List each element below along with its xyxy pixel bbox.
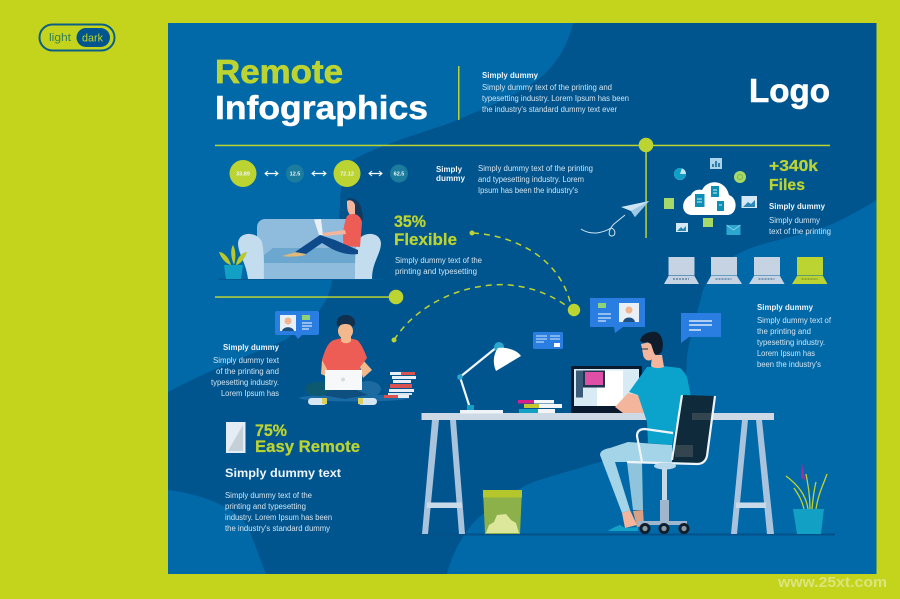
left text block: Simply dummy text [213, 356, 280, 365]
intro text block: the industry's standard dummy text ever [482, 105, 617, 114]
panel: infographic background [168, 23, 876, 574]
icon: potted plant near sofa [219, 245, 247, 279]
right text block: Simply dummy [757, 303, 814, 312]
text block: simply dummy: Simply dummy text of the printing [478, 164, 593, 173]
right text block: the printing and [757, 327, 811, 336]
icon: paper plane [581, 201, 649, 236]
icon: tablet [226, 422, 246, 453]
title divider [458, 66, 460, 120]
number circles row: 72.12 [340, 172, 354, 178]
number circles row [230, 160, 408, 187]
left text block [211, 343, 280, 398]
left text block: typesetting industry. [211, 378, 279, 387]
lower left text block: Simply dummy text [225, 466, 341, 480]
watermark: www.25xt.com [777, 574, 887, 591]
text block: simply dummy: Simply [436, 165, 463, 174]
flexible stat: printing and typesetting [395, 267, 477, 276]
light / dark toggle: dark [82, 32, 103, 44]
flexible stat: 35% [394, 212, 426, 231]
illustration: potted plant right [786, 463, 827, 534]
intro text block: typesetting industry. Lorem Ipsum has been [482, 94, 629, 103]
flexible stat: Simply dummy text of the [395, 256, 483, 265]
illustration: monitor [571, 366, 642, 413]
text block: simply dummy [436, 164, 593, 195]
left text block: Lorem Ipsum has [221, 389, 279, 398]
intro text block: Simply dummy text of the printing and [482, 83, 612, 92]
right text block: Lorem Ipsum has [757, 349, 815, 358]
illustration: desk lamp [457, 342, 521, 414]
lower left text block: the industry's standard dummy [225, 524, 330, 533]
small dashboard card [533, 332, 563, 349]
easy remote stat: 75% [255, 421, 287, 440]
light / dark toggle: light [49, 32, 71, 44]
text block: simply dummy: Ipsum has been the industry's [478, 186, 578, 195]
floor shadow [415, 534, 835, 536]
files stat: Simply dummy [769, 202, 826, 211]
icon: cloud with files [664, 158, 757, 235]
easy remote stat: Easy Remote [255, 437, 360, 456]
flexible stat [394, 212, 483, 276]
files stat: Files [769, 177, 805, 194]
illustration: desk [422, 413, 774, 534]
files stat: Simply dummy [769, 216, 820, 225]
chat bubble: video call right [590, 298, 645, 333]
title [215, 53, 428, 126]
files stat [769, 158, 831, 236]
lower left text block [225, 466, 341, 533]
illustration: stack of books [384, 372, 416, 398]
files stat: text of the printing [769, 227, 831, 236]
left text block: of the printing and [216, 367, 279, 376]
illustration: office chair [627, 395, 715, 534]
right text block [757, 303, 832, 369]
logo: Logo [749, 72, 830, 109]
main horizontal timeline with node [215, 138, 830, 238]
title: Remote [215, 53, 343, 90]
chat bubble: video call left [275, 311, 319, 339]
text block: simply dummy: dummy [436, 174, 466, 183]
illustration: woman on sofa [218, 198, 383, 280]
illustration: desk books [518, 400, 562, 413]
lower left text block: printing and typesetting [225, 502, 306, 511]
laptops row [664, 257, 828, 284]
intro text block: Simply dummy [482, 71, 539, 80]
title: Infographics [215, 89, 428, 126]
lower left text block: Simply dummy text of the [225, 491, 313, 500]
illustration: man at desk [600, 332, 691, 531]
illustration: wastebasket [483, 490, 522, 534]
right text block: been the industry's [757, 360, 821, 369]
text block: simply dummy: and typesetting industry. Lorem [478, 175, 584, 184]
chat bubble: message [681, 313, 721, 343]
flexible stat: Flexible [394, 230, 457, 249]
number circles row: 12.5 [290, 172, 300, 178]
right text block: typesetting industry. [757, 338, 825, 347]
right text block: Simply dummy text of [757, 316, 832, 325]
left text block: Simply dummy [223, 343, 280, 352]
lower left text block: industry. Lorem Ipsum has been [225, 513, 332, 522]
easy remote stat [255, 421, 360, 456]
number circles row: 33.89 [236, 172, 250, 178]
second timeline with node [215, 290, 403, 304]
number circles row: 62.5 [394, 172, 404, 178]
dashed arrows [392, 230, 580, 342]
illustration: man with laptop [299, 315, 409, 405]
files stat: +340k [769, 158, 818, 175]
intro text block [482, 71, 629, 114]
light / dark toggle [40, 24, 114, 50]
